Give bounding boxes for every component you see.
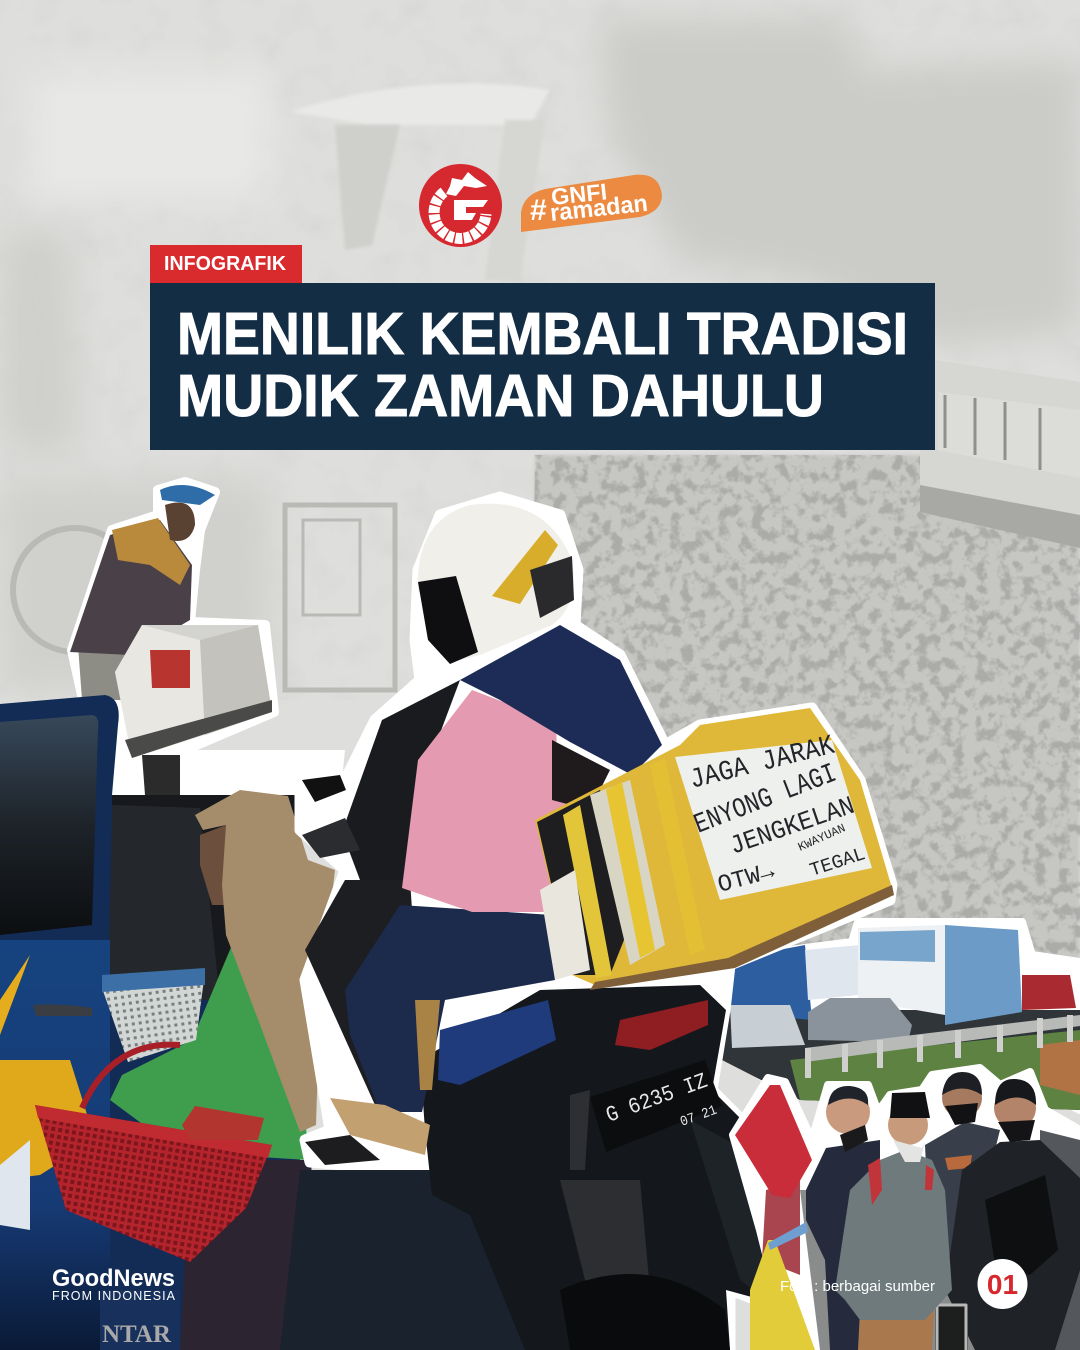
logo: Garuda roundel bbox=[419, 164, 502, 247]
title block: MUDIK ZAMAN DAHULU bbox=[177, 363, 824, 429]
cars and guard rail bbox=[1022, 975, 1076, 1010]
page number badge: 01 bbox=[987, 1269, 1018, 1300]
helmet bbox=[418, 504, 574, 664]
text on minibus: NTAR bbox=[102, 1321, 172, 1348]
photo: blue minibus bbox=[0, 695, 300, 1350]
badge: #GNFI ramadan bbox=[521, 175, 662, 232]
white outline of bike group bbox=[300, 497, 892, 1350]
red basket bbox=[35, 1045, 272, 1262]
rolling suitcase bbox=[935, 1305, 968, 1350]
title block: MENILIK KEMBALI TRADISI bbox=[177, 301, 908, 367]
white cutout backing behind van bbox=[110, 750, 345, 800]
handwritten cardboard sign: OTW→ bbox=[715, 859, 778, 900]
photo: bus convoy on the road bbox=[712, 922, 1080, 1110]
handwritten cardboard sign: TEGAL bbox=[807, 843, 868, 882]
handwritten cardboard sign: ENYONG LAGI bbox=[690, 759, 841, 841]
number plate: 07 21 bbox=[678, 1103, 719, 1131]
cargo box bbox=[535, 708, 894, 990]
old photo: bicycle wheel and stage bbox=[13, 505, 395, 690]
motorbike body bbox=[420, 985, 782, 1350]
crowd in the old photograph bbox=[530, 455, 1080, 960]
tag: INFOGRAFIK: INFOGRAFIK bbox=[164, 253, 287, 275]
handwritten cardboard sign: JAGA JARAK bbox=[687, 731, 838, 797]
rider legs and shoes bbox=[305, 905, 555, 1165]
pink jacket bbox=[402, 690, 598, 912]
photo: travellers in masks bbox=[733, 1068, 1080, 1350]
dark street behind the motorbike bbox=[280, 1170, 580, 1350]
photo credit: Foto : berbagai sumber bbox=[780, 1278, 935, 1295]
badge: #GNFI ramadan: GNFI bbox=[550, 178, 608, 210]
number plate: G 6235 IZ bbox=[603, 1069, 711, 1129]
brand: GoodNews from Indonesia: GoodNews bbox=[52, 1265, 175, 1292]
brand: GoodNews from Indonesia: FROM INDONESIA bbox=[52, 1289, 176, 1303]
photo: motorbike with riders and cargo bbox=[280, 497, 894, 1350]
woman in red hijab and yellow skirt bbox=[735, 1085, 815, 1350]
bus: large white right bbox=[858, 925, 945, 1015]
bus: blue and white left bbox=[715, 945, 812, 1020]
front rider bbox=[302, 680, 460, 1105]
handwritten cardboard sign: JENGKELAN bbox=[726, 791, 859, 862]
navy headscarf bbox=[460, 625, 662, 775]
man in glasses and navy t-shirt bbox=[925, 1072, 1000, 1270]
badge: #GNFI ramadan: ramadan bbox=[549, 190, 649, 227]
man in black jacket with backpack bbox=[945, 1079, 1080, 1350]
handwritten cardboard sign bbox=[675, 731, 872, 900]
photo: woman with baskets bbox=[35, 790, 335, 1350]
title block bbox=[150, 283, 935, 450]
photo: man lifting box bbox=[70, 482, 274, 795]
number plate bbox=[590, 1060, 722, 1152]
handwritten cardboard sign: KWAYUAN bbox=[796, 821, 848, 855]
white basket bbox=[102, 968, 205, 1062]
tag: INFOGRAFIK bbox=[150, 245, 302, 283]
man in navy with hand to mouth bbox=[806, 1086, 880, 1350]
page number badge bbox=[978, 1259, 1028, 1309]
young man in grey shirt and black cap bbox=[835, 1092, 952, 1350]
bus in the old photograph bbox=[920, 360, 1080, 548]
badge: #GNFI ramadan: # bbox=[530, 194, 547, 227]
